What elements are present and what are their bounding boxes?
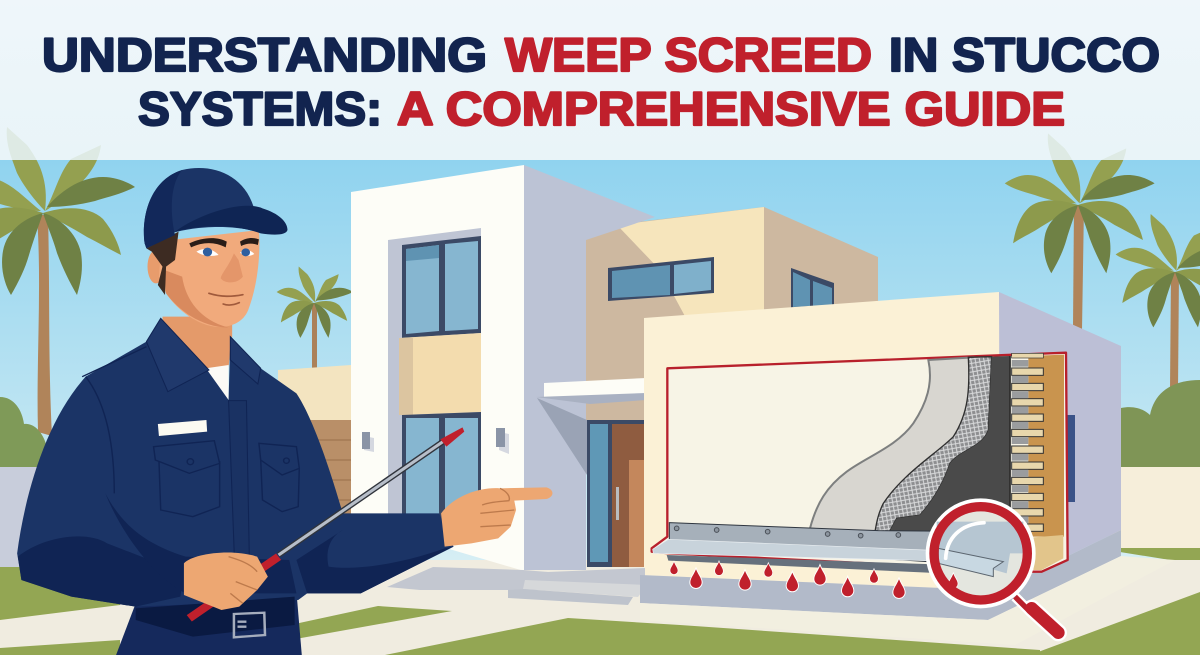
collar left [146, 318, 209, 392]
name tag [158, 420, 207, 436]
screed screws [674, 526, 901, 538]
holding hand [184, 552, 268, 610]
left chest pocket [154, 441, 220, 517]
trousers [116, 592, 302, 655]
eyebrows [189, 238, 259, 247]
bushes right [1121, 380, 1200, 470]
header band [0, 0, 1200, 160]
ground and grass base [0, 560, 1200, 655]
lath mesh layer [875, 357, 992, 540]
neck [162, 317, 232, 373]
lawn foreground centre [385, 618, 1040, 655]
tower white lower left of window [351, 400, 388, 525]
magnifying glass [926, 498, 1058, 633]
magnified flange [937, 522, 1023, 573]
upper window [402, 236, 481, 338]
palm tree right large [1005, 133, 1155, 330]
wall left [0, 467, 60, 570]
head [159, 230, 259, 327]
tower window recess [388, 228, 481, 520]
lawn patch near path [290, 606, 452, 640]
nose [221, 253, 243, 282]
wall lamp right [496, 428, 509, 454]
shirt [17, 318, 454, 607]
lawn right [1120, 548, 1200, 560]
header base [0, 0, 1200, 160]
water drops from weep screed [670, 562, 905, 598]
red outline frame [652, 353, 1068, 572]
dark weather barrier layer [885, 356, 1009, 540]
belt [136, 597, 295, 637]
screed underside [667, 555, 1002, 576]
magnified lip [938, 548, 1003, 577]
tower grey side [524, 165, 655, 570]
hair [146, 232, 179, 295]
garage wood panel [310, 420, 352, 530]
low building behind, beige [278, 365, 351, 426]
shirt shadows [18, 493, 454, 607]
ear [147, 250, 165, 283]
title [42, 28, 1160, 135]
magnified drop [949, 574, 958, 588]
walkway [640, 556, 1175, 645]
inspector figure [17, 168, 552, 655]
canopy [536, 378, 646, 404]
magnifier handle [1015, 597, 1058, 633]
horizontal wood lath strips [1010, 353, 1043, 537]
canopy shadow [537, 398, 587, 475]
wall lamp left [362, 432, 374, 452]
lawn foreground right [1030, 592, 1200, 655]
shirt placket [229, 401, 250, 593]
pointing hand [441, 487, 552, 547]
lens rim [934, 507, 1027, 600]
title line 2 part 1: SYSTEMS: [138, 82, 382, 135]
undershirt [205, 365, 229, 401]
cutaway section of stucco wall [652, 353, 1068, 633]
base coat layer [810, 357, 973, 537]
beige block side [999, 292, 1121, 573]
cap [144, 168, 287, 248]
lawn left [0, 567, 120, 620]
title line 1 part 1: UNDERSTANDING [42, 28, 487, 81]
lens [926, 498, 1036, 608]
palm tree right small [1116, 214, 1200, 390]
mouth [209, 293, 243, 305]
lower window [402, 412, 481, 530]
tan block window [608, 257, 714, 301]
entry steps [508, 580, 647, 605]
pointer rod [189, 427, 464, 618]
right chest pocket [259, 443, 299, 512]
face shadow [164, 270, 229, 328]
tan upper block [586, 207, 878, 420]
belt buckle [234, 613, 265, 637]
palm tree left: trunk and fronds [0, 127, 135, 436]
beige panel [399, 333, 481, 415]
shirt shoulder seam [82, 347, 146, 493]
bushes left [0, 397, 50, 467]
timber stud [1028, 355, 1064, 537]
house [351, 165, 1121, 590]
lens highlight [946, 523, 984, 558]
tower white lower right of window [481, 400, 524, 571]
entry door [587, 420, 645, 567]
title line 1 highlight: WEEP SCREED [505, 28, 872, 81]
tan side window [791, 268, 834, 308]
palm tree small behind tower [277, 266, 353, 369]
foundation grey band [640, 530, 1121, 620]
sky background [0, 160, 1200, 655]
tower base slab [387, 567, 645, 590]
lawn bottom left [0, 640, 120, 655]
title line 1 part 2: IN STUCCO [889, 28, 1160, 81]
screed drip lip [653, 539, 1005, 563]
eyes [196, 248, 254, 256]
timber sill block [1033, 535, 1063, 570]
wall right [1110, 467, 1200, 550]
tower white front [351, 165, 524, 571]
title line 2 highlight: A COMPREHENSIVE GUIDE [397, 82, 1065, 135]
beige block front [644, 292, 1000, 590]
blue side window [1066, 415, 1075, 502]
collar right [230, 337, 261, 384]
screed nailing flange [669, 523, 1007, 567]
